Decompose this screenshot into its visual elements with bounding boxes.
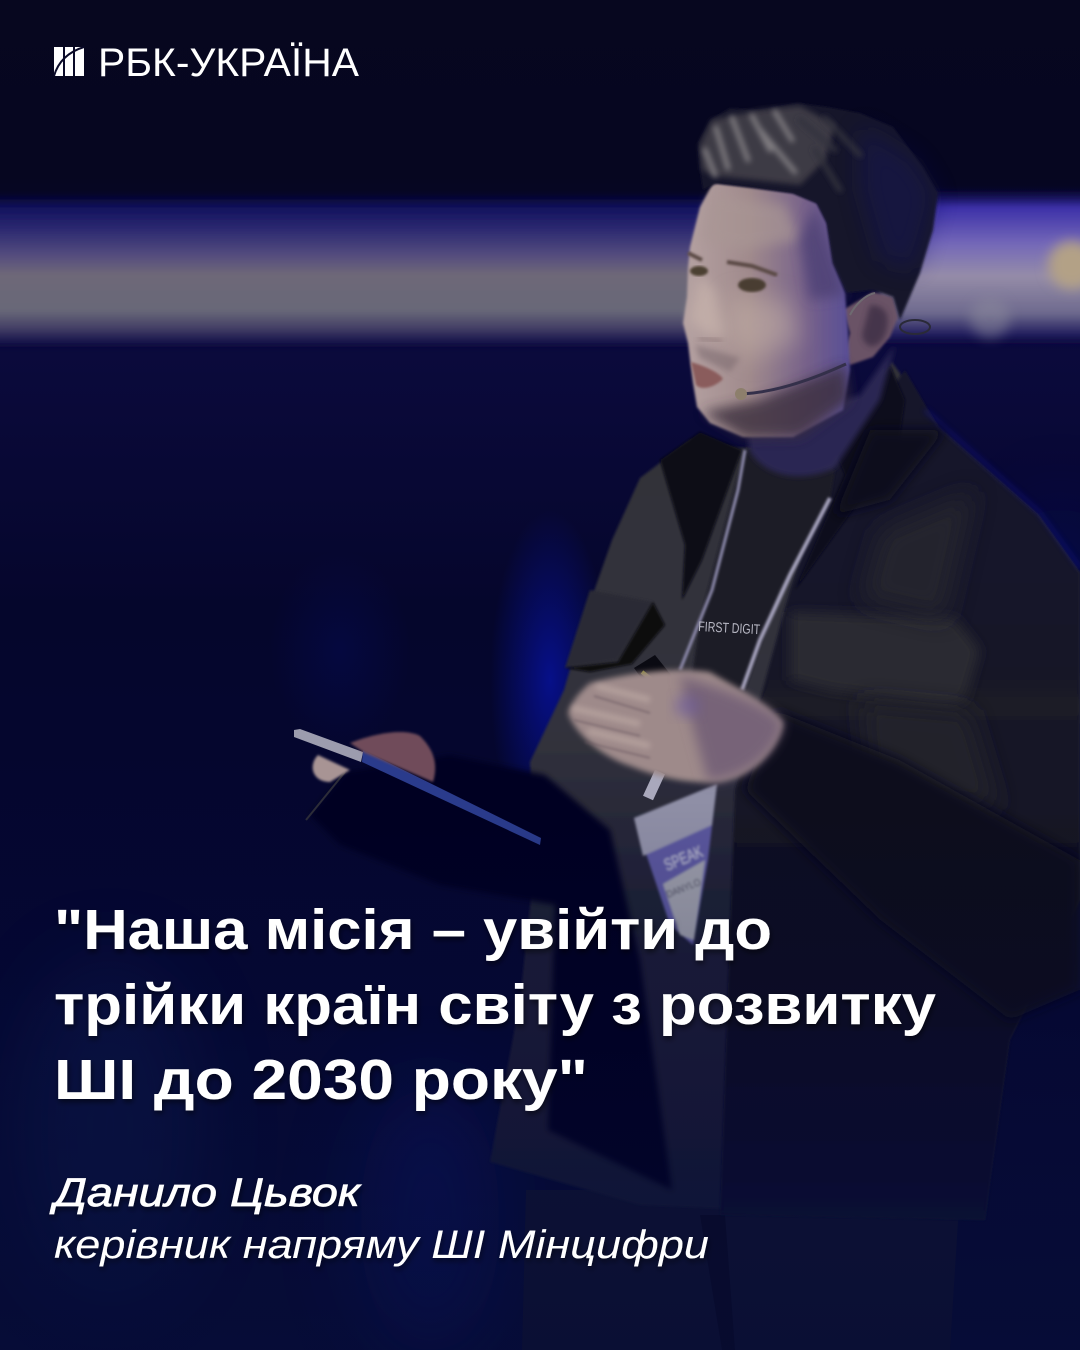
nose underside (698, 338, 722, 341)
trousers (522, 1190, 960, 1350)
conference badge: DANYLO (665, 877, 703, 901)
tablet (294, 729, 541, 845)
forehead highlight (700, 195, 800, 250)
eyes (690, 266, 708, 276)
t-shirt (690, 448, 835, 690)
face (683, 183, 850, 437)
t-shirt print: FIRST DIGIT (698, 618, 761, 637)
speaker role: керівник напряму ШІ Мінцифри (54, 1223, 709, 1267)
clicker in hand (634, 655, 675, 690)
lanyard strips (680, 450, 745, 670)
quote heading: "Наша місія – увійти до (54, 898, 772, 962)
hair blue side (860, 125, 936, 270)
stubble shadow (702, 365, 850, 438)
jacket right side shading (720, 370, 1080, 1220)
quote heading: трійки країн світу з розвитку (54, 973, 936, 1037)
logo mark (54, 47, 84, 76)
conference badge (634, 784, 717, 945)
head (683, 103, 938, 438)
attribution (49, 1171, 709, 1267)
shoulder rim light (925, 410, 1080, 568)
temple shadow (800, 205, 845, 300)
dark collar left (660, 432, 742, 600)
logo: РБК-Україна (54, 41, 360, 85)
hair lit strands (705, 112, 860, 190)
left hand (350, 732, 435, 782)
right hand (568, 670, 783, 782)
hair (698, 103, 938, 320)
jacket highlight folds (790, 612, 980, 705)
dark collar right (795, 365, 905, 590)
neck (746, 345, 895, 476)
quote heading (54, 898, 936, 1112)
speaker photo figure (294, 103, 1080, 1350)
eyebrows (688, 253, 777, 275)
right forearm dark sleeve (745, 710, 1080, 1020)
lower gradient overlay (0, 800, 1080, 1350)
mouth (691, 362, 723, 388)
speaker name: Данило Цьвок (49, 1171, 362, 1215)
headset microphone (742, 364, 846, 394)
logo wordmark: РБК-УКРАЇНА (98, 41, 360, 85)
forearm and tablet shadow (310, 755, 672, 1190)
cheek highlight (725, 295, 800, 360)
nose highlight (690, 275, 725, 338)
left pocket flap (565, 590, 653, 668)
ear (843, 292, 898, 365)
jacket body (490, 362, 1080, 1220)
conference badge: SPEAK (661, 842, 706, 875)
hair front lit mass (700, 106, 835, 185)
quote heading: ШІ до 2030 року" (54, 1048, 588, 1112)
